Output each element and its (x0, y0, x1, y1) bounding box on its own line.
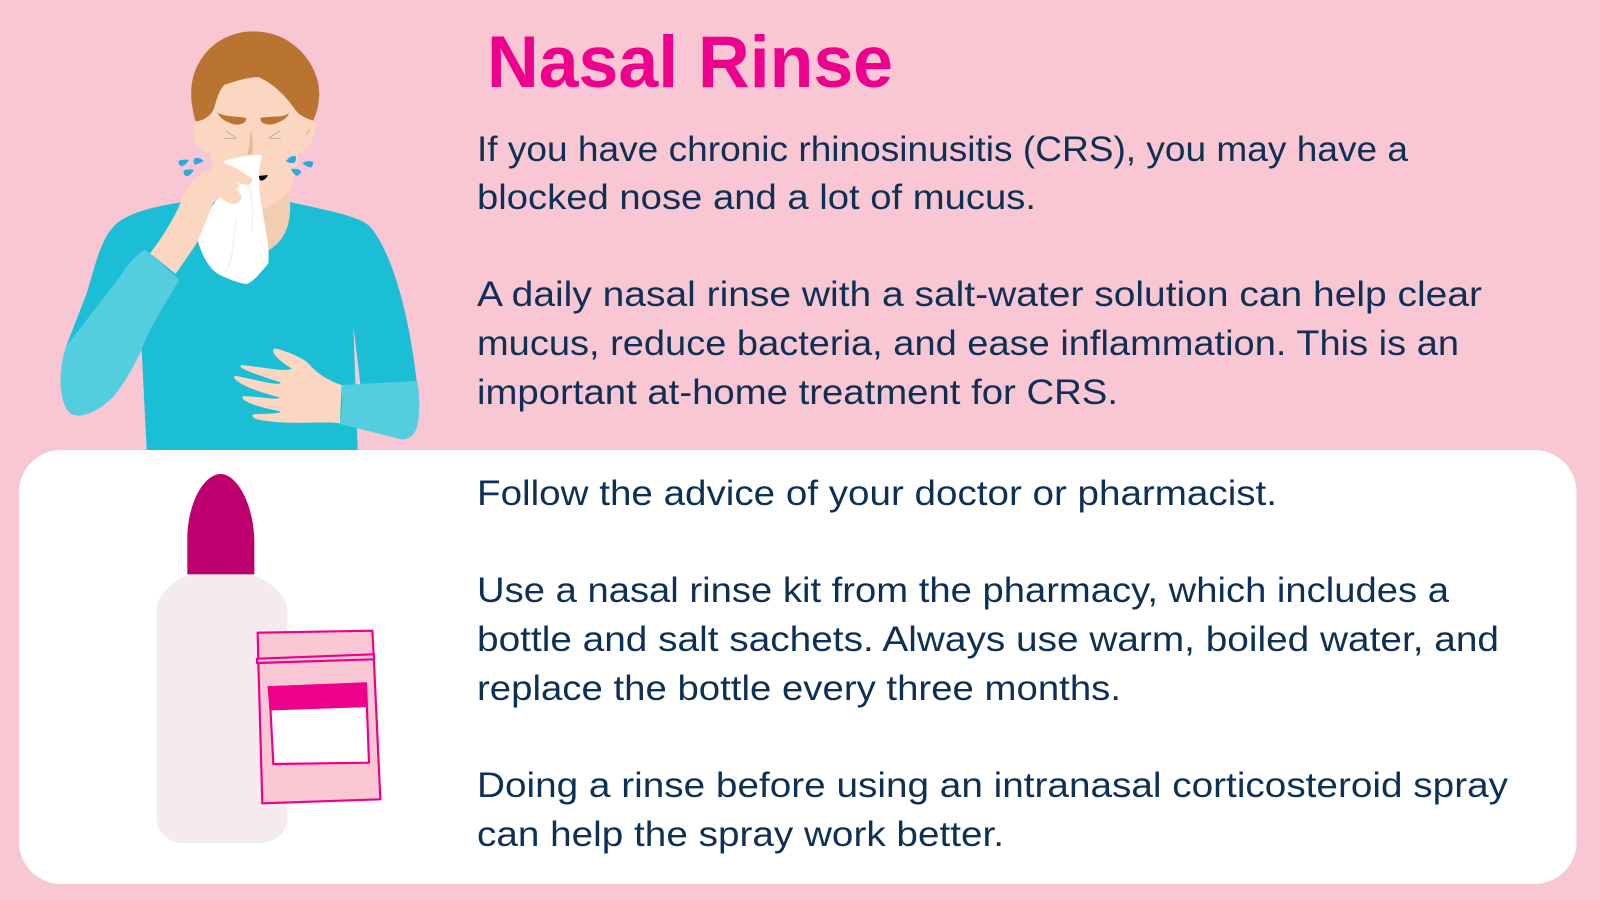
text block: about CRS: blocked nose and a lot of mucus. (477, 177, 1036, 217)
right sleeve (340, 381, 419, 439)
bottle cap (187, 474, 254, 574)
mouth (258, 175, 268, 181)
illustration: person blowing nose (61, 31, 419, 450)
salt sachet (257, 631, 380, 803)
text block: spray timing (477, 765, 1508, 854)
illustration: rinse bottle and salt sachet (157, 474, 380, 843)
sweater torso (66, 202, 417, 450)
nose and ear shading (247, 128, 311, 155)
text block: benefits of rinse: mucus, reduce bacteria, and ease inflammation. This is an (477, 323, 1459, 363)
text block: about CRS: If you have chronic rhinosinusitis (CRS), you may have a (477, 129, 1408, 169)
text block: advice: Follow the advice of your doctor or pharmacist. (477, 473, 1277, 513)
text block: benefits of rinse (477, 274, 1482, 412)
bottle body (157, 576, 287, 843)
white panel (19, 450, 1576, 884)
eyebrows (218, 113, 289, 125)
closed eyes (224, 131, 281, 139)
tissue folds (225, 185, 253, 272)
text block: spray timing: Doing a rinse before using an intranasal corticosteroid spray (477, 765, 1508, 805)
tissue (197, 155, 269, 284)
text block: rinse kit (477, 570, 1499, 708)
sweat drops (179, 156, 313, 176)
left sleeve (61, 250, 179, 416)
hand and forearm (150, 163, 252, 274)
text block: rinse kit: replace the bottle every three months. (477, 668, 1121, 708)
text block: spray timing: can help the spray work better. (477, 814, 1004, 854)
face (193, 67, 315, 211)
title: Nasal Rinse (487, 22, 893, 103)
neck (250, 187, 290, 251)
hair (191, 31, 319, 122)
text block: benefits of rinse: important at-home treatment for CRS. (477, 372, 1118, 412)
text block: benefits of rinse: A daily nasal rinse with a salt-water solution can help clear (477, 274, 1482, 314)
text block: about CRS (477, 129, 1408, 217)
right hand (234, 348, 342, 423)
text block: rinse kit: Use a nasal rinse kit from the pharmacy, which includes a (477, 570, 1449, 610)
text block: rinse kit: bottle and salt sachets. Always use warm, boiled water, and (477, 619, 1499, 659)
